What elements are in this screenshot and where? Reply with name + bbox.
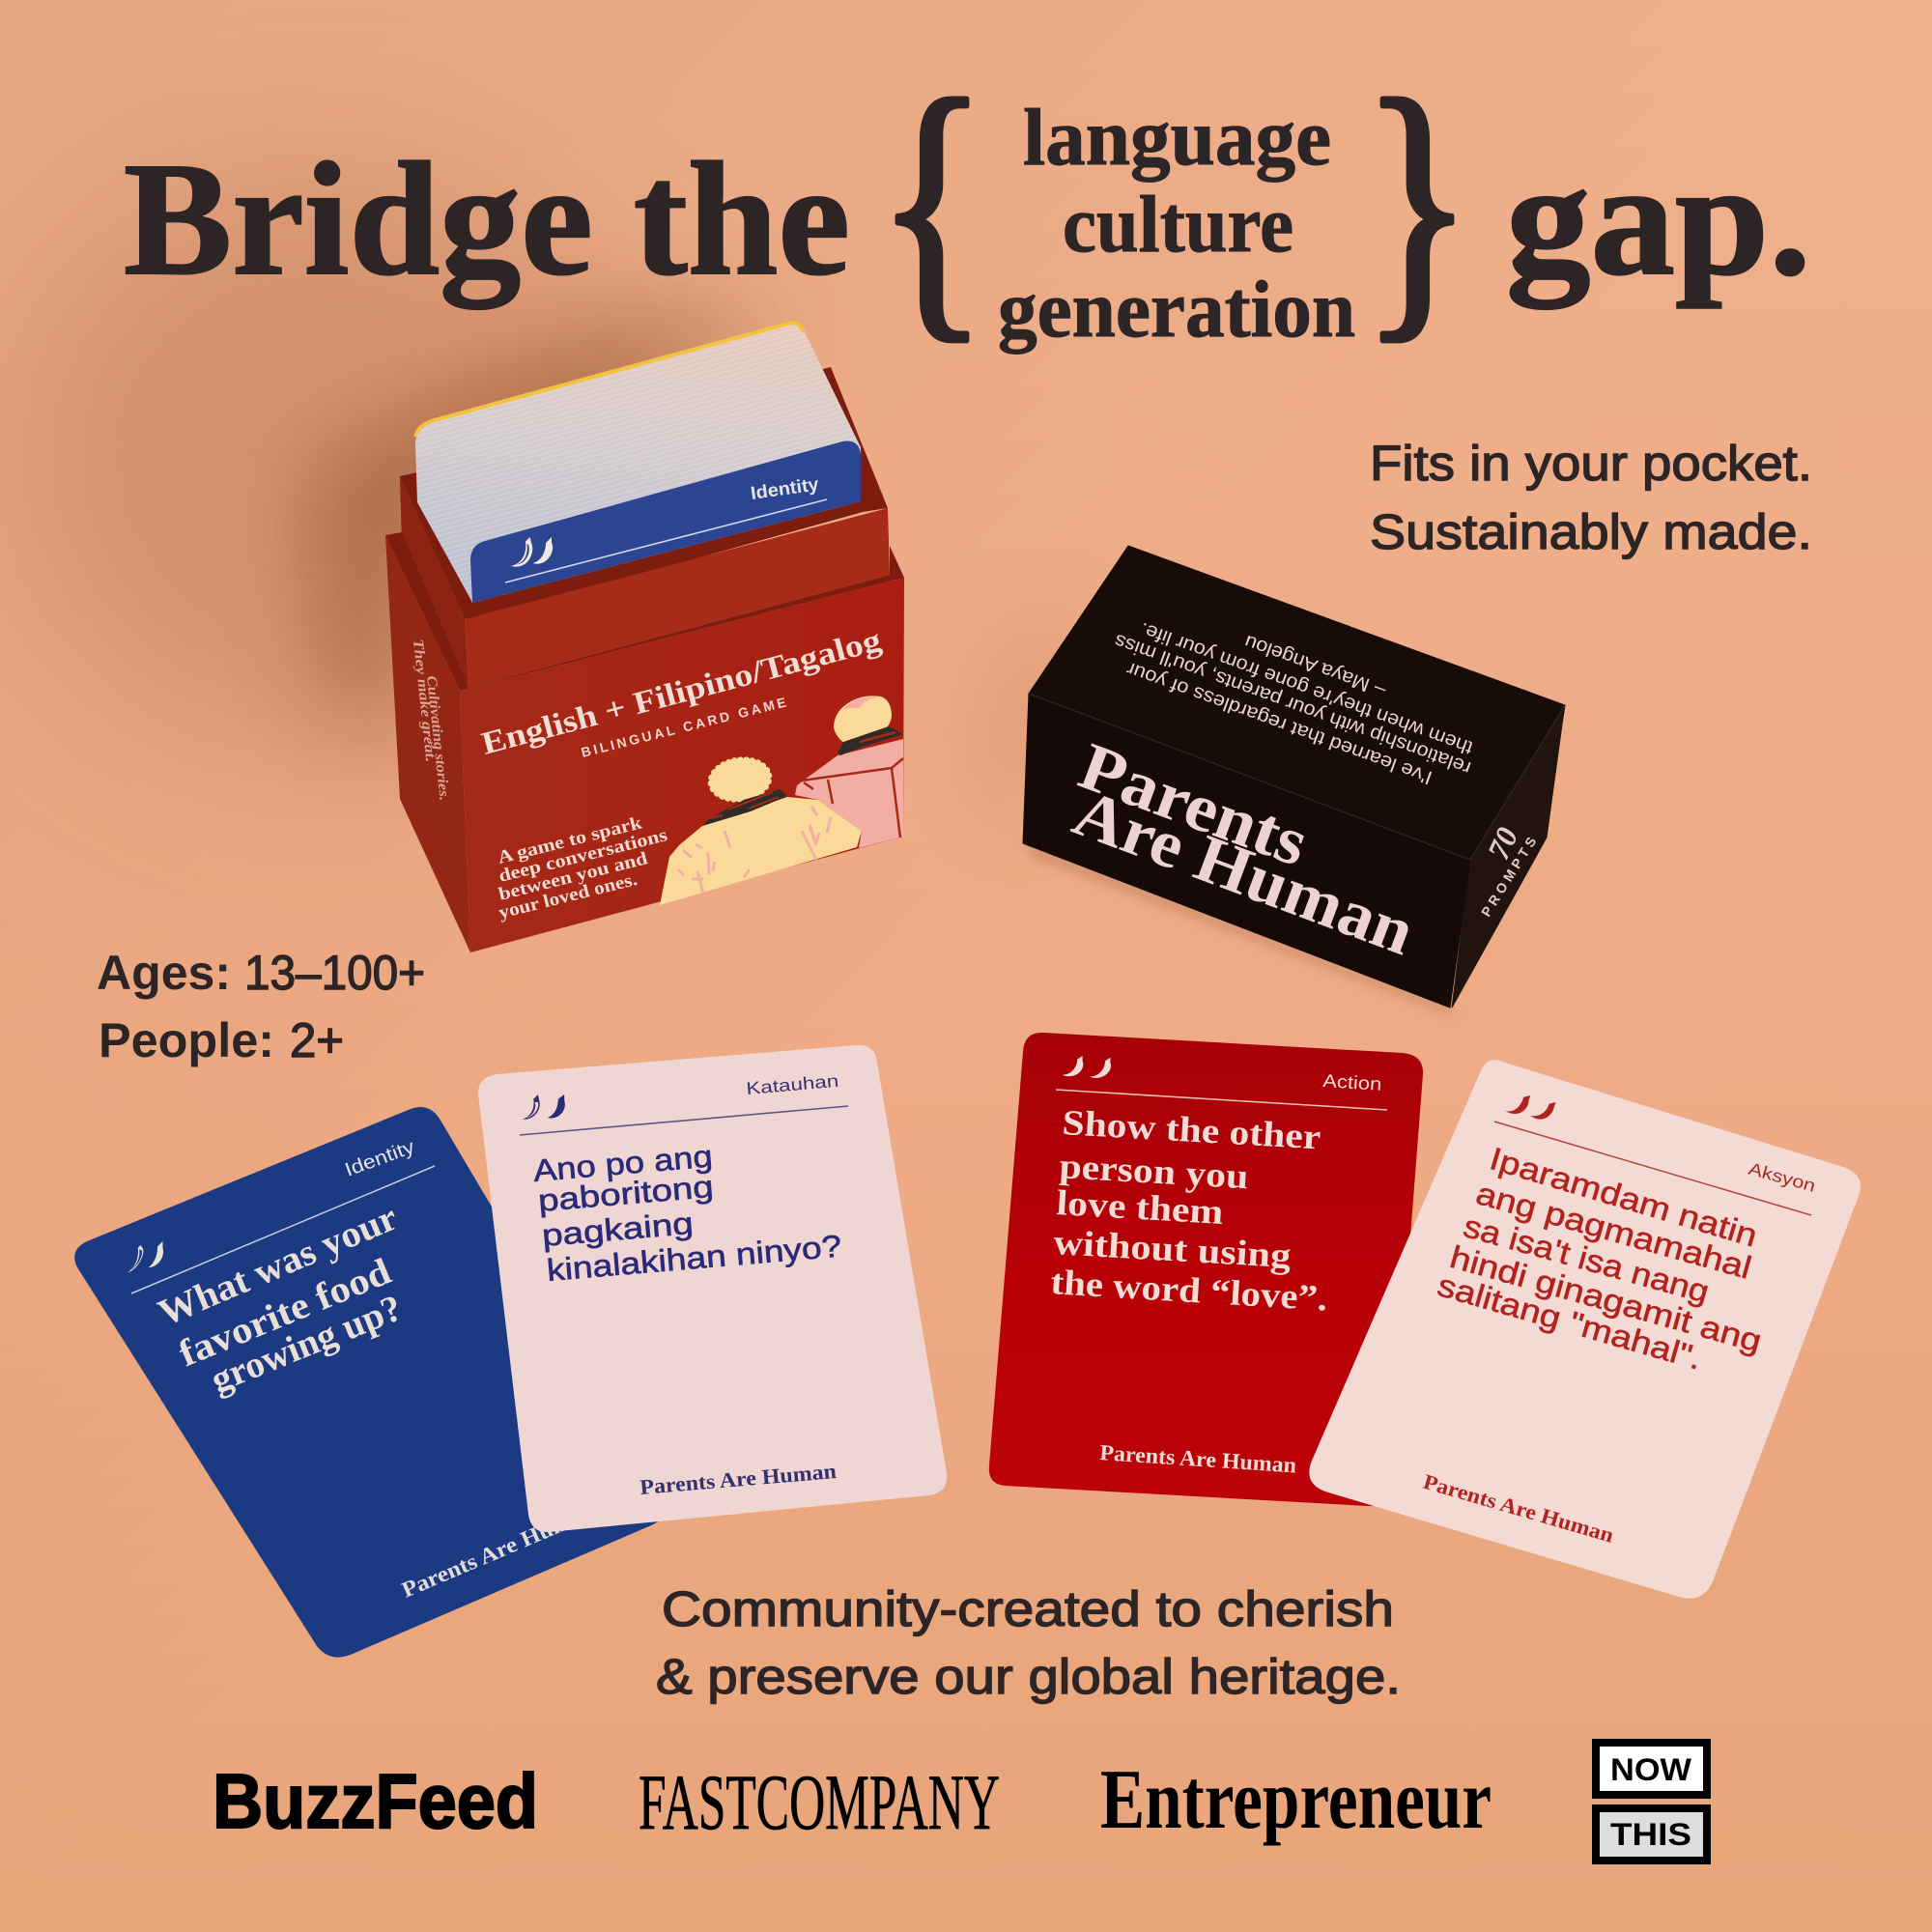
- label: Katauhan: [746, 1071, 839, 1098]
- word: generation: generation: [998, 265, 1355, 355]
- box description: between you and: [497, 848, 650, 905]
- brand: Parents Are Human: [1099, 1440, 1297, 1478]
- brand name: Are Human: [1064, 776, 1424, 970]
- deck top: [415, 324, 861, 603]
- outer box front face: [460, 578, 904, 952]
- outer box rim: [385, 532, 904, 691]
- box shadows on backdrop: [19, 174, 1072, 831]
- label: Action: [1322, 1071, 1382, 1095]
- left brace: {: [876, 43, 988, 365]
- icon: chillies: [1505, 1095, 1555, 1120]
- front face: [1023, 694, 1470, 1008]
- press logos: [213, 1739, 1711, 1864]
- box description: deep conversations: [497, 825, 669, 887]
- yellow card edge: [415, 323, 804, 437]
- label: Aksyon: [1747, 1159, 1818, 1196]
- logo: NowThis: NOW: [1610, 1752, 1692, 1787]
- icon: chillies: [1062, 1056, 1111, 1078]
- illustration: pink figure: [795, 696, 903, 848]
- card: cream Aksyon: [1309, 1060, 1861, 1599]
- question: Ano po ang: [532, 1139, 714, 1188]
- action text: [1049, 1103, 1328, 1320]
- rule: [505, 499, 827, 582]
- quote on top face: I've learned that regardless of your: [1123, 658, 1435, 788]
- box subheading: BILINGUAL CARD GAME: [580, 694, 789, 760]
- card: blue Identity: [74, 1107, 668, 1658]
- text: ages and people: [97, 946, 425, 1067]
- left side text: Cultivating stories.: [423, 675, 452, 802]
- black box: [1023, 546, 1565, 1014]
- inner box left face: [400, 476, 469, 688]
- question: What was your: [153, 1197, 404, 1334]
- question: favorite food: [173, 1250, 397, 1375]
- outer box left face: [385, 535, 470, 952]
- card deck: [415, 323, 861, 603]
- front blue card: [470, 441, 861, 603]
- question: [153, 1197, 408, 1401]
- text: pocket and sustainability: Fits in your pocket.: [1370, 436, 1812, 491]
- logo: NowThis: [1592, 1739, 1711, 1864]
- heading: Bridge the: Bridge the: [124, 129, 850, 309]
- icon: chillies: [523, 1094, 565, 1120]
- text: pocket and sustainability: [1370, 436, 1812, 559]
- title: Bridge the { language culture generation } gap.: [124, 43, 1811, 365]
- rule: [131, 1166, 435, 1293]
- logo: Fast Company: FASTCOMPANY: [639, 1758, 1000, 1846]
- quote on top face: – Maya Angelou: [1241, 631, 1389, 701]
- quote on top face: relationship with your parents, you'll miss: [1112, 630, 1474, 779]
- inner box front face: [465, 508, 890, 688]
- action text: salitang "mahal".: [1434, 1266, 1706, 1377]
- side label: 70 prompts: PROMPTS: [1478, 834, 1539, 920]
- action text: without using: [1052, 1223, 1293, 1276]
- action text: love them: [1055, 1183, 1225, 1233]
- text: ages and people: 13–100+: [244, 946, 425, 1000]
- brand name: Parents: [1069, 729, 1318, 881]
- logo: Entrepreneur: Entrepreneur: [1100, 1753, 1492, 1847]
- inner box back and interior: [400, 367, 888, 619]
- left side text: They make great.: [410, 639, 438, 763]
- box description: your loved ones.: [497, 869, 639, 923]
- text: community: Community-created to cherish: [662, 1581, 1394, 1636]
- text: community: [656, 1581, 1401, 1704]
- text: ages and people: Ages:: [97, 946, 231, 1000]
- side label: 70 prompts: 70: [1481, 822, 1524, 865]
- action text: sa isa't isa nang: [1460, 1208, 1713, 1310]
- question: pagkaing: [541, 1206, 695, 1253]
- brand: Parents Are Human: [1421, 1469, 1616, 1548]
- top face: [1029, 546, 1565, 860]
- action text: Iparamdam natin: [1486, 1140, 1762, 1254]
- edge highlight: [1029, 694, 1565, 860]
- text: ages and people: People:: [99, 1013, 274, 1067]
- left side text: [410, 639, 452, 802]
- brand: Parents Are Human: [639, 1459, 838, 1499]
- right brace: }: [1361, 43, 1473, 365]
- text: ages and people: 2+: [290, 1013, 344, 1067]
- card: cream Katauhan: [478, 1045, 947, 1532]
- label: Identity: [342, 1136, 417, 1181]
- question: growing up?: [205, 1287, 408, 1401]
- action text: person you: [1058, 1147, 1250, 1197]
- action text: the word “love”.: [1049, 1263, 1328, 1320]
- card: red Action: [989, 1033, 1423, 1506]
- action text: [1434, 1140, 1766, 1377]
- logo: BuzzFeed: BuzzFeed: [213, 1758, 538, 1844]
- icon: chillies: [128, 1241, 163, 1272]
- question: kinalakihan ninyo?: [546, 1228, 843, 1288]
- text: community: & preserve our global heritage.: [656, 1649, 1401, 1704]
- text: pocket and sustainability: Sustainably made.: [1370, 504, 1812, 559]
- question: paboritong: [537, 1169, 715, 1218]
- word: language: language: [1023, 93, 1331, 183]
- word: culture: culture: [1063, 180, 1293, 270]
- action text: hindi ginagamit ang: [1446, 1238, 1766, 1359]
- red card box: [385, 323, 904, 952]
- right face: [1452, 705, 1565, 1008]
- icon: chillies: [511, 537, 553, 567]
- quote on top face: them when they're gone from your life.: [1137, 617, 1476, 758]
- box description: [496, 812, 669, 923]
- heading: gap.: gap.: [1506, 129, 1811, 309]
- logo: NowThis: THIS: [1610, 1817, 1691, 1852]
- box description: A game to spark: [496, 812, 644, 868]
- action text: Show the other: [1061, 1103, 1321, 1157]
- rule: [1056, 1090, 1387, 1110]
- box heading: English + Filipino/Tagalog: [478, 623, 885, 762]
- soft contact shadow: [1023, 843, 1454, 1014]
- question: [532, 1139, 843, 1288]
- illustration: yellow figure: [660, 756, 862, 905]
- rule: [1494, 1122, 1811, 1215]
- brand: Parents Are Human: [398, 1498, 599, 1603]
- rule: [520, 1106, 848, 1135]
- label: Identity: Identity: [750, 474, 820, 504]
- action text: ang pagmamahal: [1472, 1175, 1755, 1286]
